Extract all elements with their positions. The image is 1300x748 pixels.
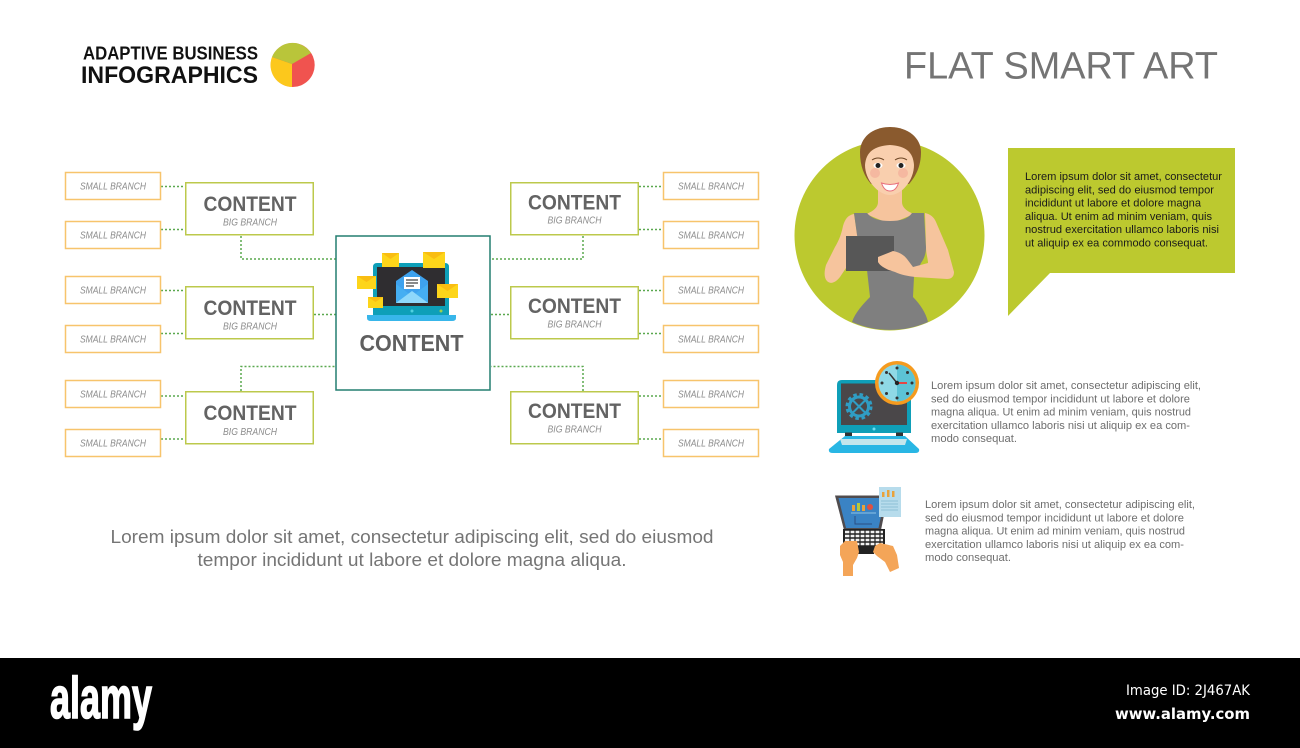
text block: callout text: adipiscing elit, sed do eiusmod tempor: [1025, 184, 1214, 196]
panel: left small branches: SMALL BRANCH: [80, 182, 147, 192]
text block: callout text: ut aliquip ex ea commodo consequat.: [1025, 238, 1208, 250]
neck and chest: [866, 186, 914, 224]
title: FLAT SMART ART: [904, 46, 1218, 88]
panel: left big branches: CONTENT: [204, 402, 297, 425]
hair: [860, 127, 921, 184]
logo heading: [81, 44, 258, 89]
text block: callout text: nostrud exercitation ullamco laboris nisi: [1025, 224, 1219, 236]
footer logo: alamy: [50, 666, 152, 731]
panel: left small branches: SMALL BRANCH: [80, 230, 147, 242]
panel: central content: CONTENT: [360, 330, 464, 356]
text block: laptop description: modo consequat.: [931, 433, 1017, 445]
left arm: [825, 214, 858, 283]
text block: typing description: magna aliqua. Ut enim ad minim veniam, quis nostrud: [925, 526, 1185, 538]
text block: typing description: Lorem ipsum dolor sit amet, consectetur adipiscing elit,: [925, 499, 1195, 511]
footer url: www.alamy.com: [1115, 705, 1250, 723]
logo heading: INFOGRAPHICS: [81, 62, 258, 89]
text block: typing description: modo consequat.: [925, 552, 1011, 564]
text block: callout text: incididunt ut labore et dolore magna: [1025, 198, 1202, 210]
icon: laptop with gear and clock: [829, 361, 919, 453]
panel: right big branches: CONTENT: [528, 295, 621, 318]
footer image id: Image ID: 2J467AK: [1126, 683, 1251, 699]
footer bar: [0, 658, 1300, 748]
panel: left small branches: SMALL BRANCH: [80, 334, 147, 346]
text block: bottom caption: Lorem ipsum dolor sit amet, consectetur adipiscing elit, sed do eiusmod: [110, 527, 714, 547]
text block: typing description: sed do eiusmod tempor incididunt ut labore et dolore: [925, 512, 1184, 524]
text block: laptop description: Lorem ipsum dolor sit amet, consectetur adipiscing elit,: [931, 380, 1201, 392]
text block: laptop description: sed do eiusmod tempor incididunt ut labore et dolore: [931, 393, 1190, 405]
panel: left big branches: [186, 183, 313, 444]
illustration: woman with tablet: [794, 127, 984, 330]
panel: left big branches: CONTENT: [204, 297, 297, 320]
panel: left small branches: [66, 172, 160, 456]
tablet: [846, 236, 894, 271]
panel: right big branches: BIG BRANCH: [548, 424, 602, 436]
panel: right big branches: CONTENT: [528, 192, 621, 214]
panel: right small branches: SMALL BRANCH: [678, 390, 745, 400]
panel: right small branches: SMALL BRANCH: [678, 438, 745, 450]
panel: right big branches: [511, 183, 638, 444]
panel: central content: [336, 236, 490, 390]
dress: [852, 213, 928, 330]
panel: left small branches: SMALL BRANCH: [80, 438, 147, 450]
panel: right small branches: SMALL BRANCH: [678, 334, 745, 346]
panel: left big branches: BIG BRANCH: [223, 216, 277, 228]
icon: hands typing on laptop: [835, 487, 901, 576]
text block: laptop description: magna aliqua. Ut enim ad minim veniam, quis nostrud: [931, 407, 1191, 419]
text block: bottom caption: [110, 527, 714, 570]
right arm and hand: [878, 213, 954, 279]
text block: callout text: Lorem ipsum dolor sit amet, consectetur: [1025, 171, 1222, 183]
text block: typing description: [925, 499, 1195, 564]
text block: laptop description: exercitation ullamco laboris nisi ut aliquip ex ea com-: [931, 420, 1190, 432]
icon: laptop with envelopes: [357, 252, 458, 321]
text block: callout text: [1025, 171, 1222, 250]
connectors: [161, 186, 663, 439]
callout: speech bubble: [1008, 148, 1235, 316]
icon: logo pie: [270, 43, 315, 87]
text block: laptop description: [931, 380, 1201, 445]
panel: left big branches: BIG BRANCH: [223, 320, 277, 332]
panel: left small branches: SMALL BRANCH: [80, 286, 147, 296]
panel: left big branches: BIG BRANCH: [223, 426, 277, 438]
logo heading: ADAPTIVE BUSINESS: [83, 44, 258, 64]
panel: left small branches: SMALL BRANCH: [80, 390, 147, 400]
text block: typing description: exercitation ullamco laboris nisi ut aliquip ex ea com-: [925, 539, 1184, 551]
panel: right small branches: SMALL BRANCH: [678, 182, 745, 192]
face: [865, 145, 914, 195]
panel: left big branches: CONTENT: [204, 193, 297, 216]
panel: right big branches: BIG BRANCH: [548, 318, 602, 330]
text block: callout text: aliqua. Ut enim ad minim veniam, quis: [1025, 211, 1212, 223]
panel: right small branches: SMALL BRANCH: [678, 230, 745, 242]
panel: right big branches: BIG BRANCH: [548, 214, 602, 226]
text block: bottom caption: tempor incididunt ut labore et dolore magna aliqua.: [198, 550, 626, 570]
panel: right big branches: CONTENT: [528, 400, 621, 423]
panel: right small branches: SMALL BRANCH: [678, 286, 745, 296]
panel: right small branches: [664, 172, 758, 456]
